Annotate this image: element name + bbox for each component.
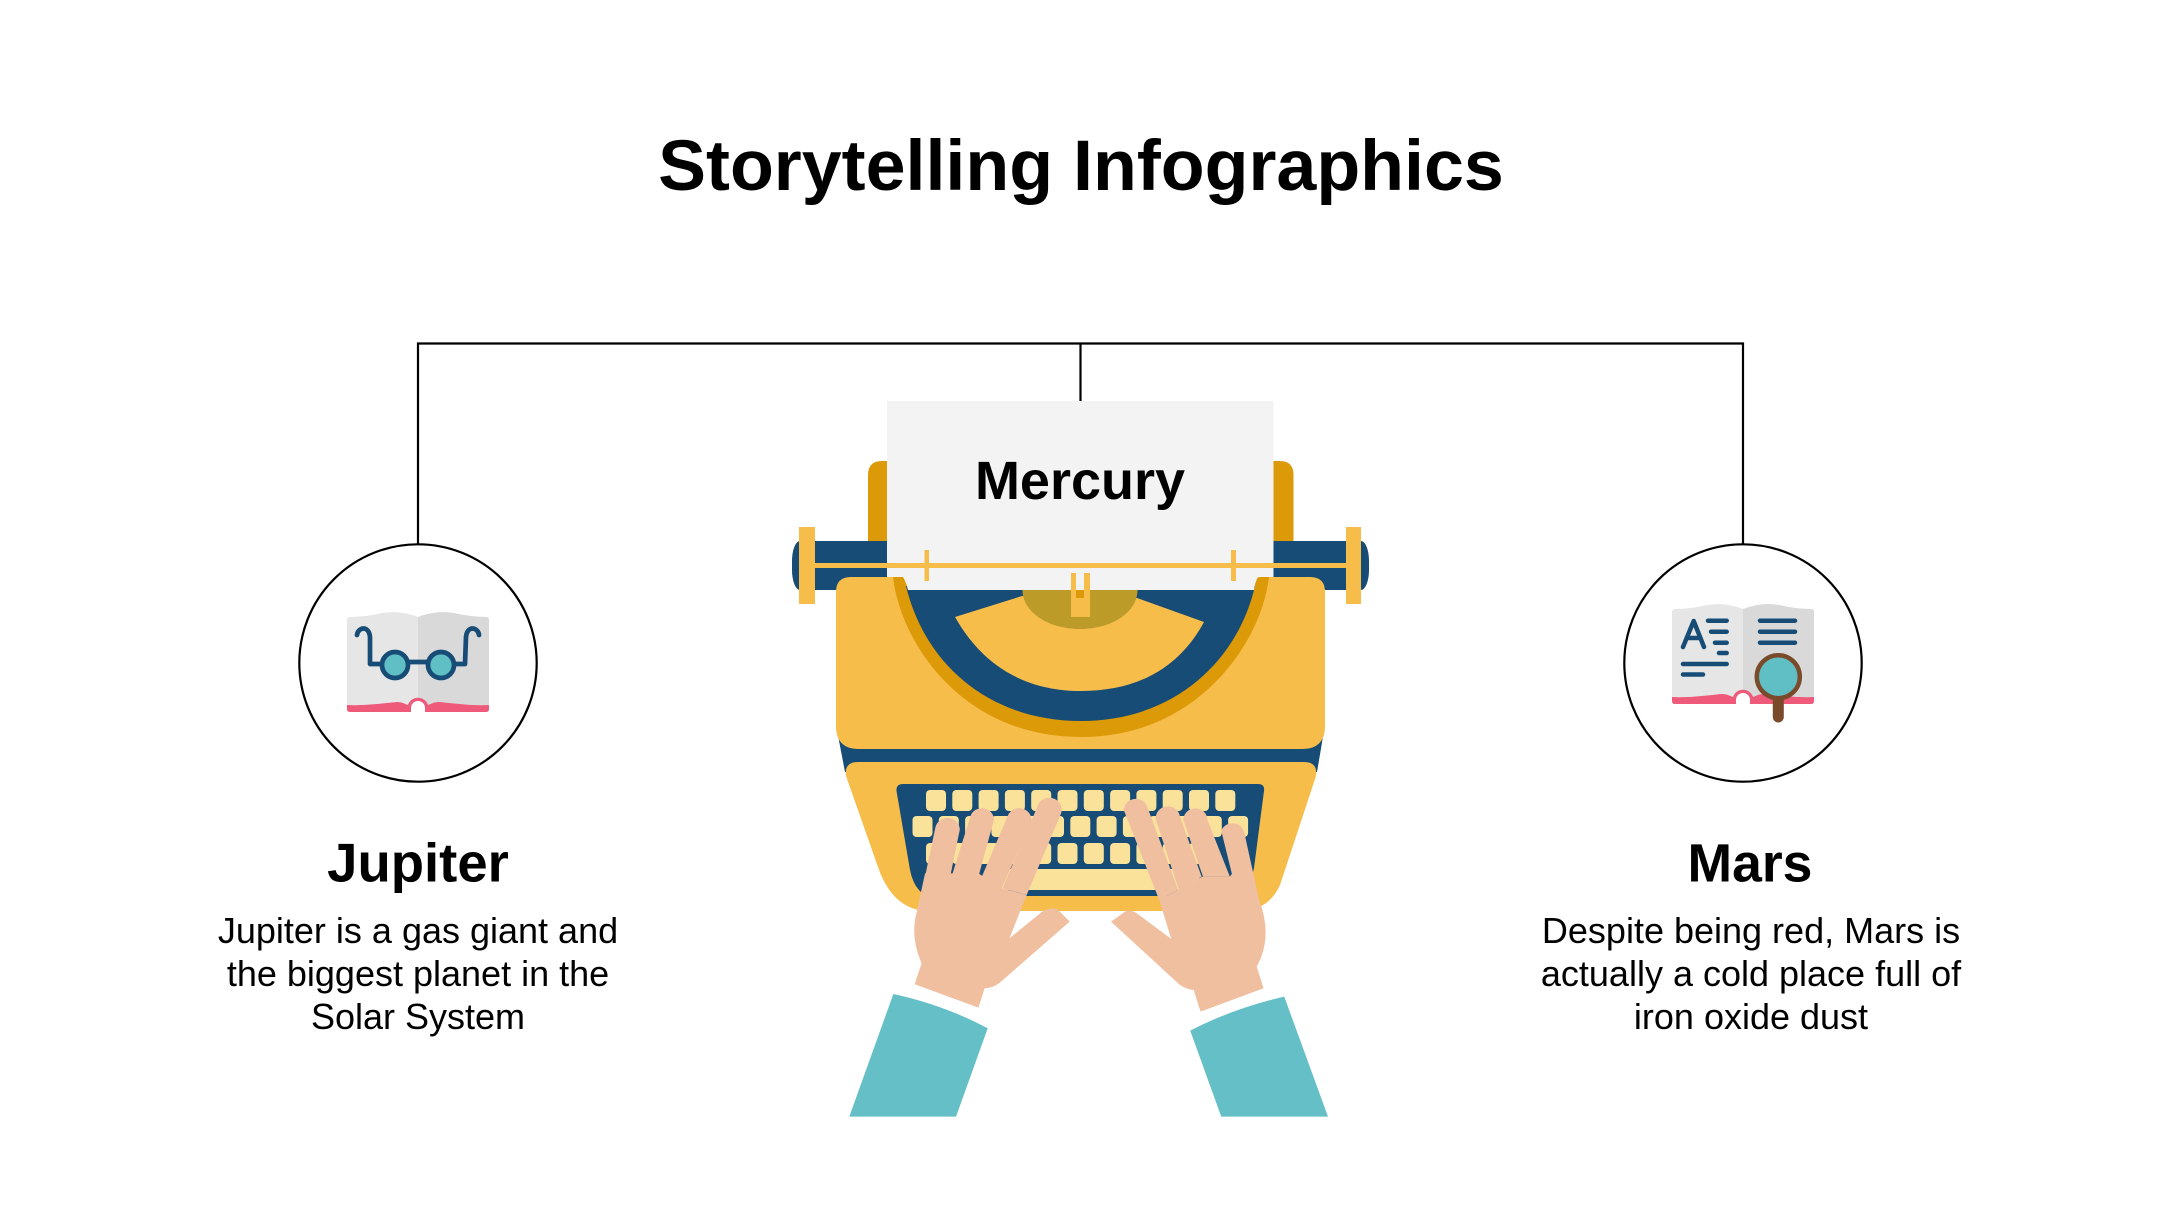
keyboard tray [896,784,1264,896]
type basket rim [893,577,1269,737]
body text: Jupiter: Jupiter is a gas giant and [218,910,618,951]
rear band of the body [836,725,1325,772]
icon circle: Jupiter [299,544,537,782]
body text: Mars: Despite being red, Mars is [1542,910,1960,951]
heading: Mars: Mars [1688,834,1812,894]
left sleeve [849,994,988,1117]
platen roller [792,541,1369,590]
typewriter upper body [836,577,1325,749]
type bars fan [955,596,1204,691]
body text: Jupiter: the biggest planet in the [227,953,609,994]
left hand [914,798,1070,1008]
paper arms [868,461,1294,541]
paper bail bar [815,550,1346,581]
body text: Mars: iron oxide dust [1634,996,1868,1037]
icon: open book with glasses [347,612,489,713]
illustration: right hand and sleeve [1111,799,1328,1117]
body text: Mars: actually a cold place full of [1541,953,1962,994]
icon circle: Mars [1624,544,1862,782]
connector lines [418,344,1743,544]
roller knobs [799,527,1361,604]
heading: Mercury: Mercury [975,451,1185,511]
title: Storytelling Infographics [658,126,1504,206]
right hand [1111,799,1266,1012]
type hammer [1071,573,1090,617]
heading: Jupiter: Jupiter [327,832,509,894]
keys [912,790,1248,890]
type guide semicircle [1022,590,1138,629]
lower edge of paper inside the basket [903,577,1258,590]
right sleeve [1190,997,1328,1117]
illustration: left hand and sleeve [849,798,1070,1117]
panel: Jupiter [218,544,618,1037]
icon: open book with magnifier [1672,604,1814,717]
paper sheet with heading [887,401,1274,590]
panel: Mars [1541,544,1962,1037]
illustration: typewriter [792,401,1369,911]
type basket well [906,586,1255,721]
typewriter lower body [846,762,1316,911]
body text: Jupiter: Solar System [311,996,525,1037]
